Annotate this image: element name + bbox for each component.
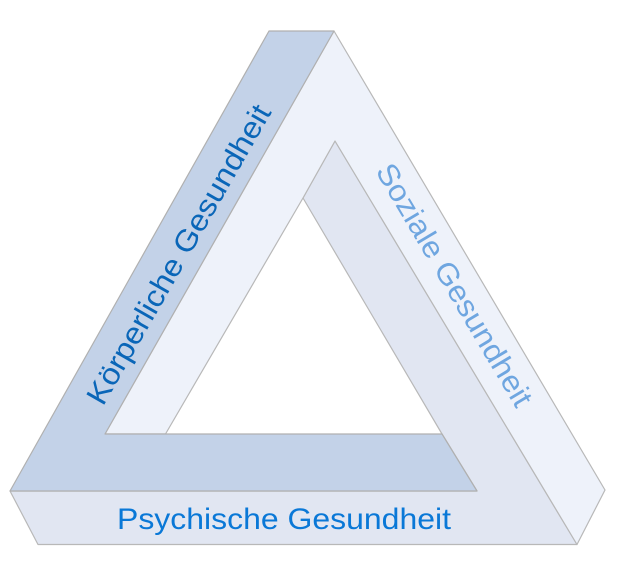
label: Soziale Gesundheit: Soziale Gesundheit: [369, 158, 539, 413]
label: Körperliche Gesundheit: Körperliche Gesundheit: [80, 98, 278, 410]
label: Psychische Gesundheit: Psychische Gesundheit: [117, 503, 452, 536]
